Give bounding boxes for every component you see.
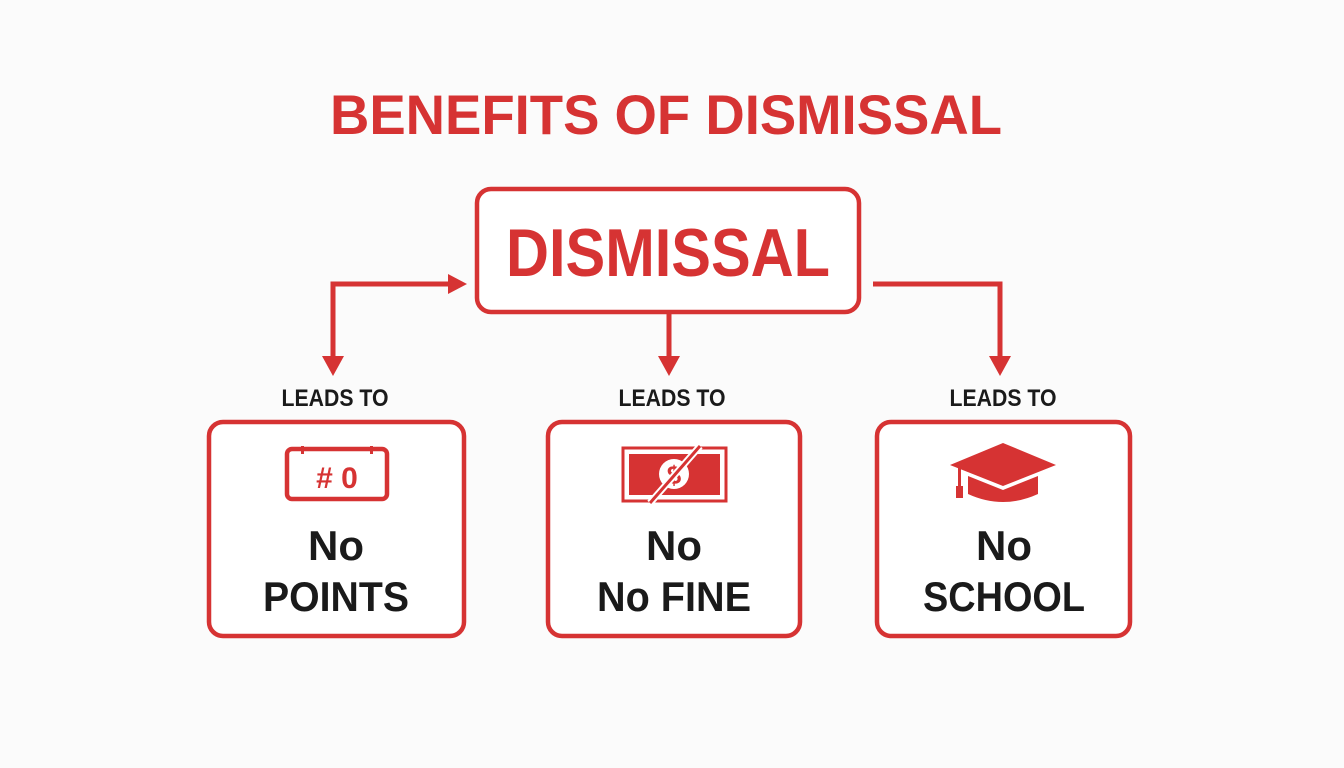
icon: crossed-out money (623, 446, 726, 503)
title: BENEFITS OF DISMISSAL (330, 83, 1002, 146)
icon: graduation cap (950, 443, 1056, 502)
label: leads to 3: LEADS TO (950, 385, 1056, 412)
label: leads to 2: LEADS TO (618, 385, 726, 412)
icon: license plate: # 0 (316, 462, 358, 495)
central box: dismissal (477, 189, 859, 312)
panel: no school: SCHOOL (923, 573, 1085, 620)
label: leads to 1: LEADS TO (282, 385, 388, 412)
panel: no points: No (308, 522, 364, 569)
central box: dismissal: DISMISSAL (506, 215, 830, 291)
arrow: middle (658, 312, 680, 376)
panel: no points (209, 422, 464, 636)
icon: license plate (287, 446, 387, 499)
panel: no fine: No (646, 522, 702, 569)
arrow: right (873, 284, 1011, 376)
arrow: left (322, 274, 467, 376)
icon: crossed-out money: $ (667, 460, 682, 490)
panel: no fine: No FINE (597, 573, 751, 620)
panel: no school (877, 422, 1130, 636)
panel: no fine (548, 422, 800, 636)
panel: no points: POINTS (263, 573, 409, 620)
panel: no school: No (976, 522, 1032, 569)
